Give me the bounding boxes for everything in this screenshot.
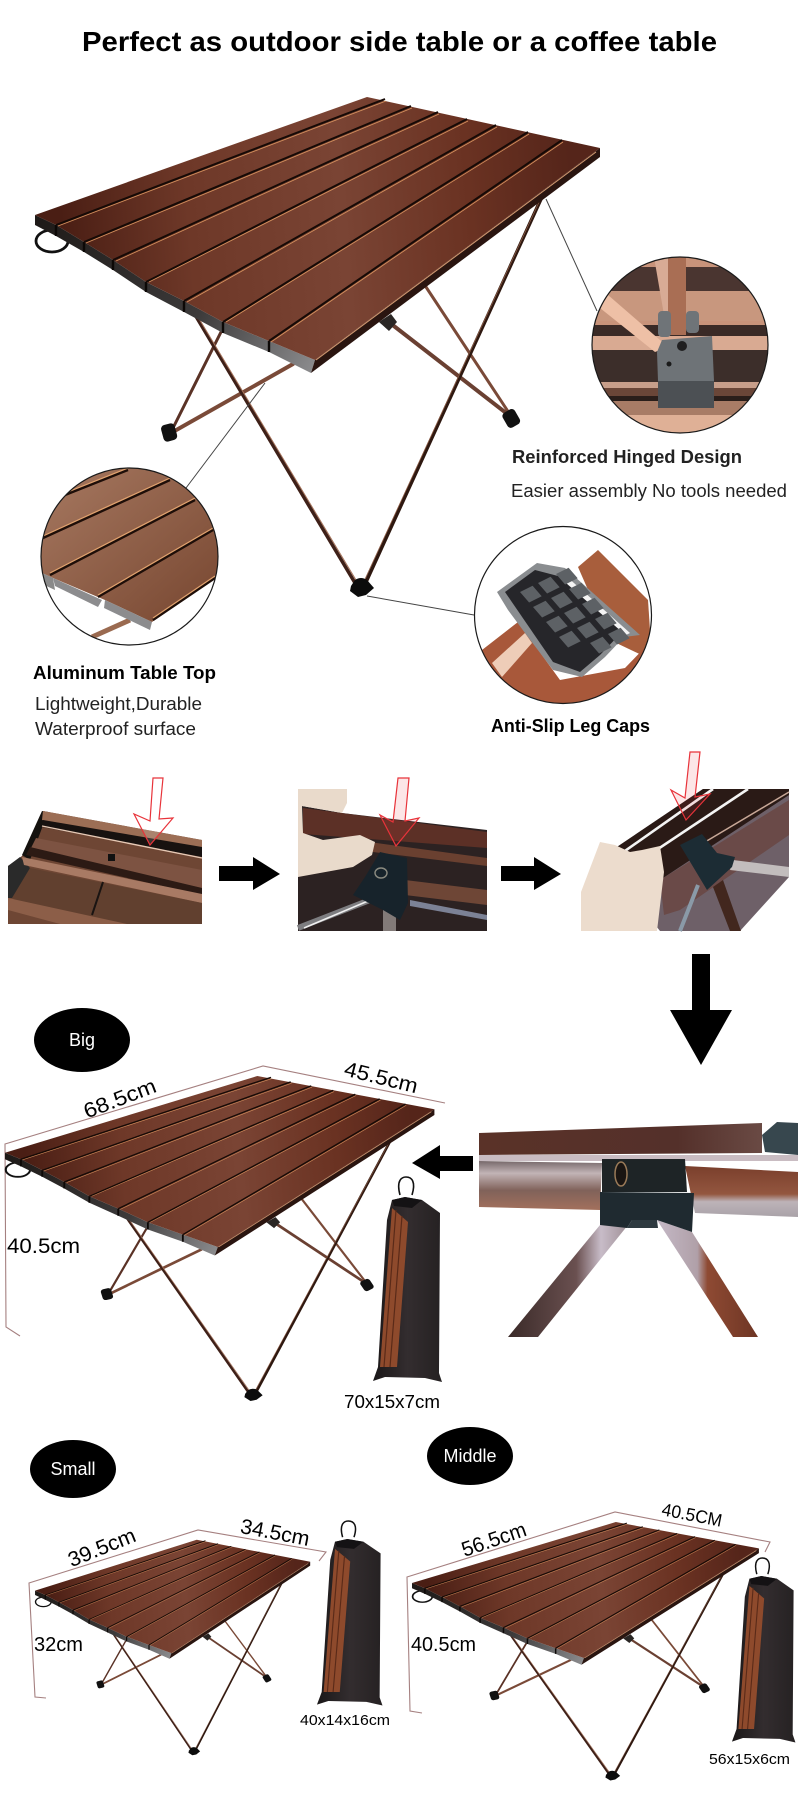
table drawing: small <box>35 1540 310 1755</box>
text: lightweight durable: Lightweight,Durable <box>35 694 202 714</box>
middle table with dimensions <box>407 1499 770 1781</box>
arrow: down to hinge <box>670 954 732 1065</box>
text: waterproof surface: Waterproof surface <box>35 719 196 739</box>
dimension: length 56.5cm: 56.5cm <box>459 1518 529 1562</box>
label: aluminum table top: Aluminum Table Top <box>33 663 216 683</box>
dimension: width 40.5CM: 40.5CM <box>660 1499 724 1531</box>
dimension: width 34.5cm: 34.5cm <box>238 1515 312 1551</box>
detail circle: reinforced hinge <box>590 255 770 435</box>
carry bag: small <box>317 1521 383 1706</box>
detail circle: aluminum table top <box>40 460 225 645</box>
leader line: table top <box>186 383 265 488</box>
label: reinforced hinged design: Reinforced Hinged Design <box>512 447 742 467</box>
size badge: big <box>34 1008 130 1072</box>
title: Perfect as outdoor side table or a coffee table <box>82 26 717 57</box>
dimension lines: middle <box>407 1512 770 1713</box>
dimension: height 32cm: 32cm <box>34 1634 83 1656</box>
carry bag: big <box>373 1177 442 1382</box>
step photo 1: rail channel <box>8 811 202 924</box>
table drawing: middle <box>412 1522 759 1781</box>
size badge: middle: Middle <box>443 1446 497 1466</box>
text: easier assembly: Easier assembly No tools needed <box>511 481 787 501</box>
arrow: step 2 to 3 <box>501 857 561 890</box>
red arrow: step 2 <box>380 778 419 846</box>
leader line: hinge <box>546 199 597 311</box>
dimension lines: big <box>5 1066 445 1336</box>
carry bag: middle <box>732 1558 795 1743</box>
label: anti-slip leg caps: Anti-Slip Leg Caps <box>491 716 650 736</box>
red arrow: step 3 <box>671 752 710 820</box>
arrow: hinge to big table <box>412 1145 473 1179</box>
dimension: length 68.5cm: 68.5cm <box>80 1075 160 1123</box>
detail circle: anti-slip leg cap <box>474 526 655 712</box>
dimension: width 45.5cm: 45.5cm <box>342 1058 420 1098</box>
step photo 3: holding the rail <box>581 789 789 931</box>
size badge: small: Small <box>50 1459 96 1479</box>
dimension: height 40.5cm: 40.5cm <box>7 1235 80 1258</box>
main table illustration <box>35 97 600 597</box>
table drawing: big <box>5 1076 434 1401</box>
red arrow: step 1 <box>134 778 173 845</box>
arrow: step 1 to 2 <box>219 857 280 890</box>
step photo 2: pressing bracket <box>298 789 487 931</box>
size badge: middle <box>427 1427 513 1485</box>
photo: hinge close-up <box>479 1122 798 1337</box>
bag size: small: 40x14x16cm <box>300 1712 390 1729</box>
small table with dimensions <box>29 1515 326 1755</box>
dimension lines: small <box>29 1530 326 1698</box>
big table with dimensions <box>5 1058 445 1401</box>
dimension: height 40.5cm: 40.5cm <box>411 1634 476 1656</box>
size badge: big: Big <box>69 1030 95 1050</box>
dimension: length 39.5cm: 39.5cm <box>65 1524 139 1572</box>
size badge: small <box>30 1440 116 1498</box>
bag size: middle: 56x15x6cm <box>709 1751 790 1768</box>
leader line: leg cap <box>367 596 474 615</box>
bag size: big: 70x15x7cm <box>344 1392 440 1412</box>
